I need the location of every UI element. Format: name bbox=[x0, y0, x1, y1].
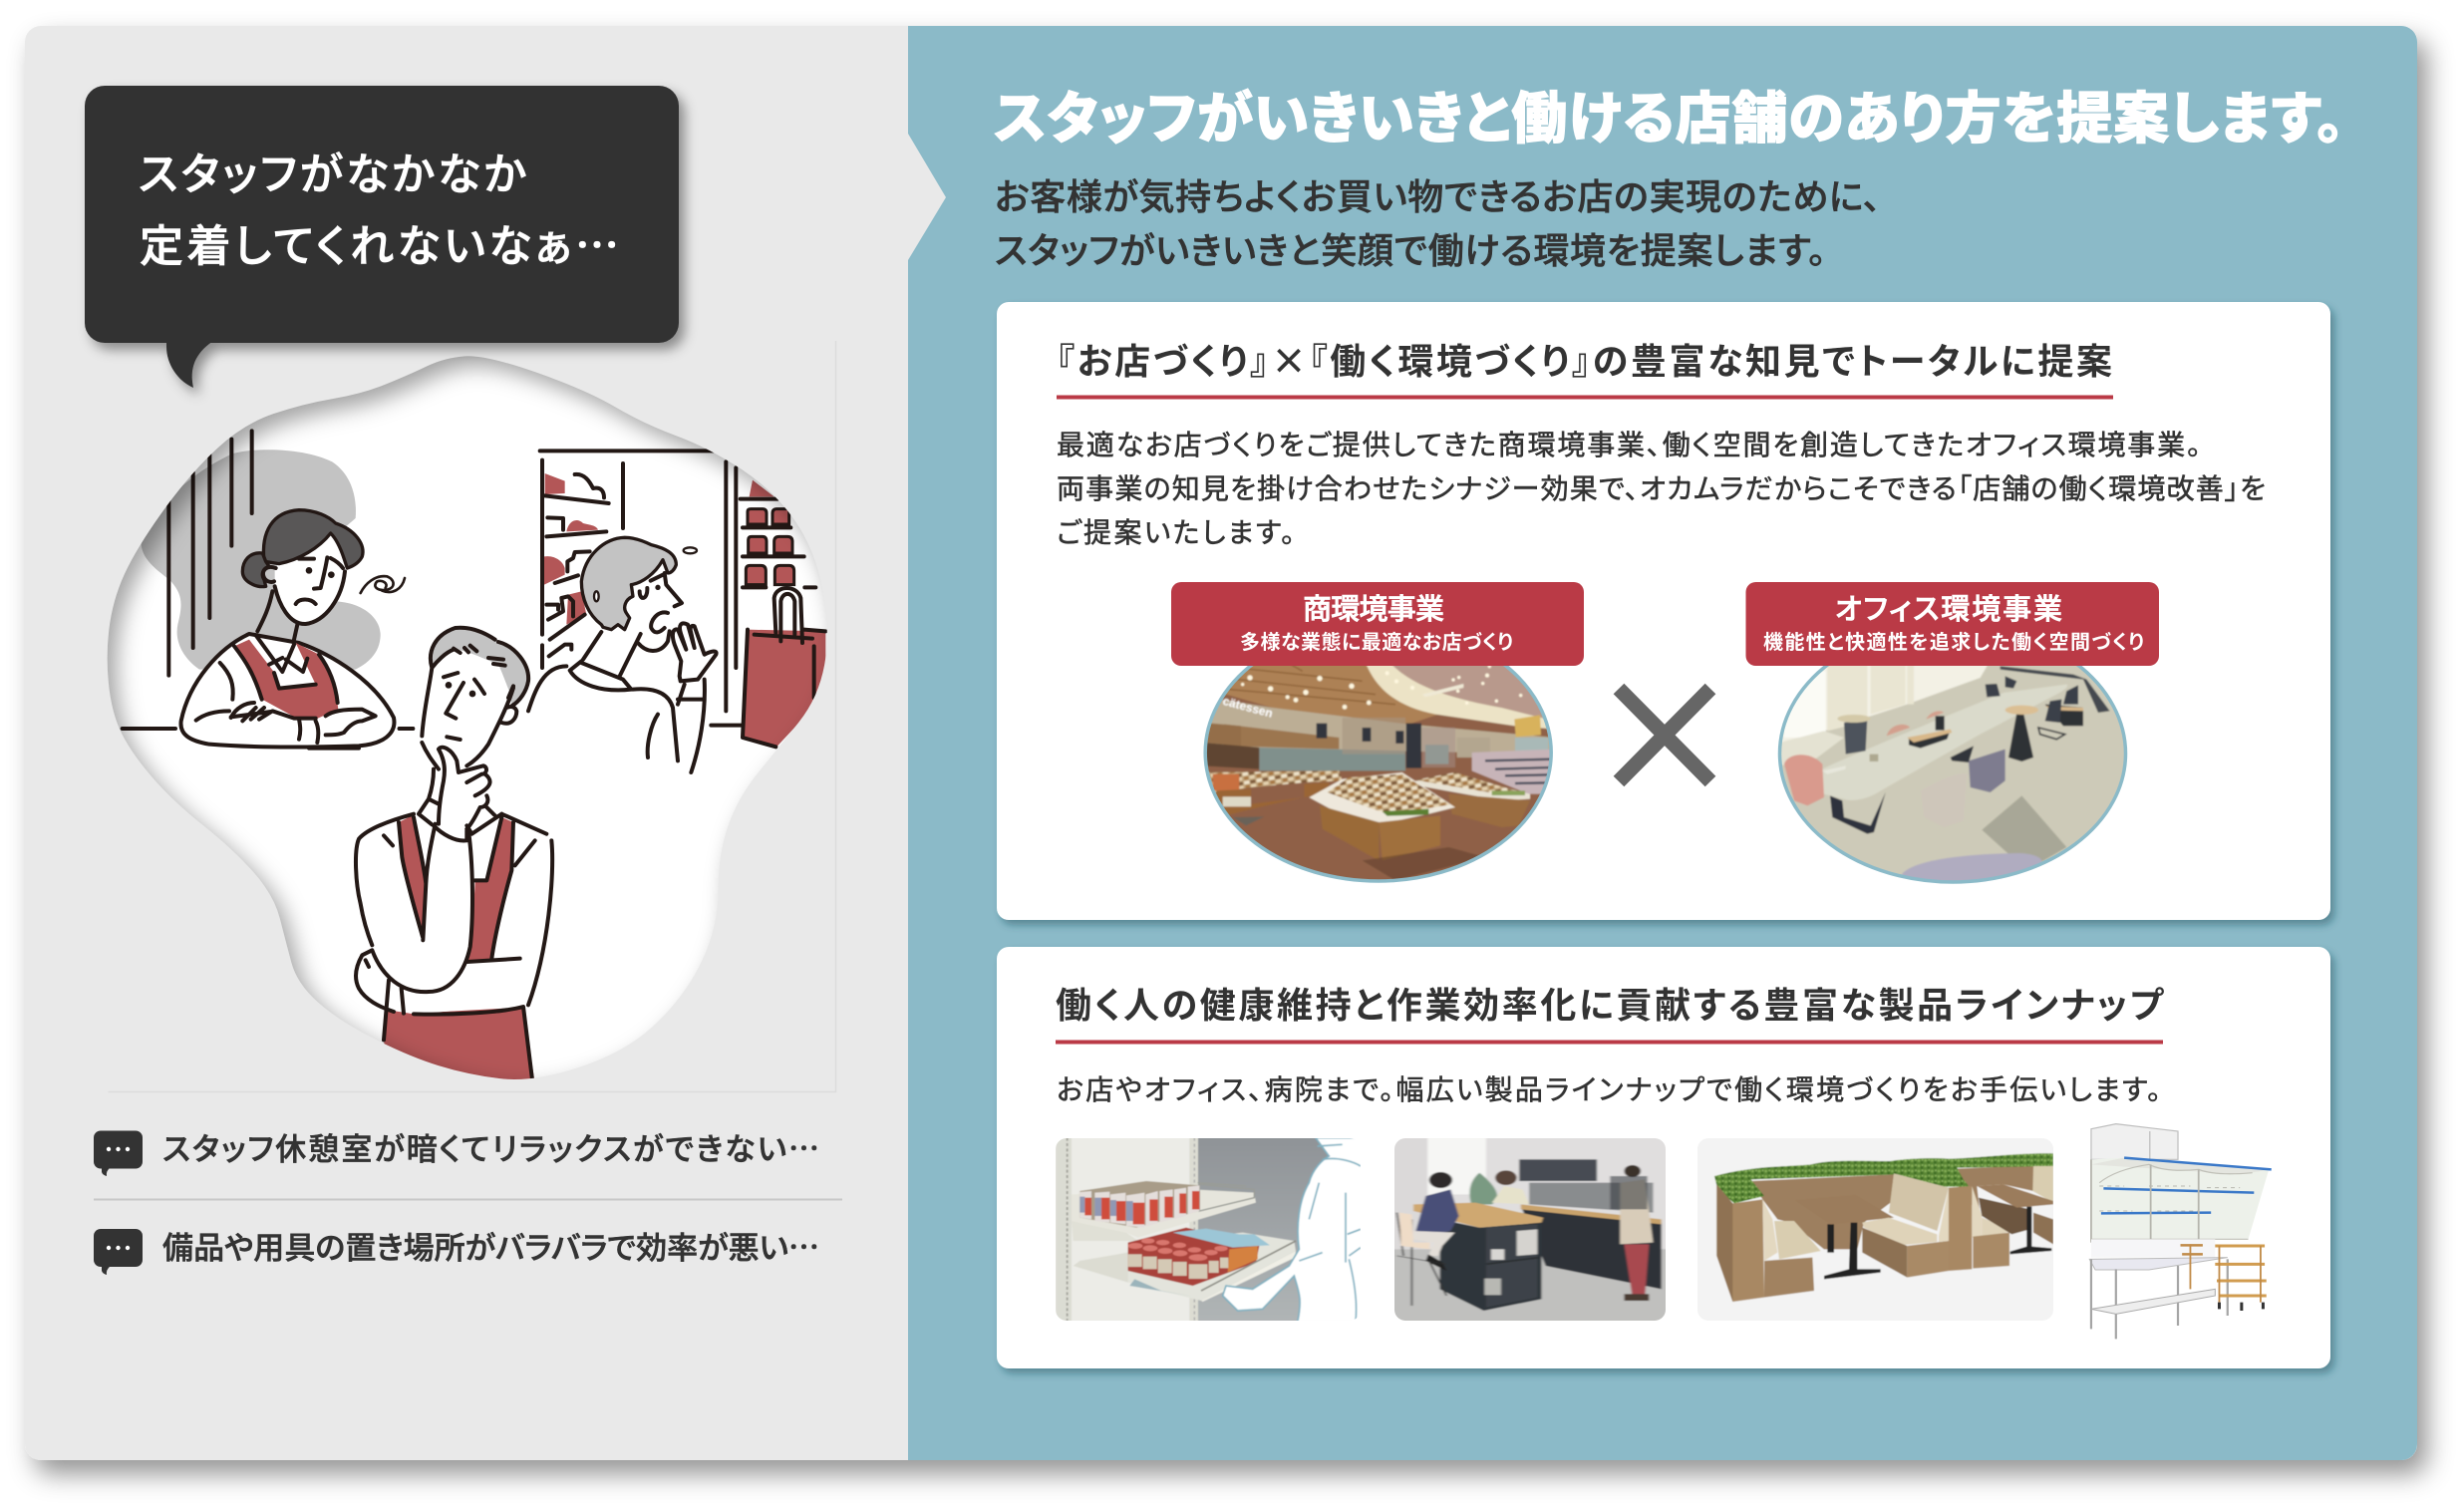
speech bubble bbox=[85, 86, 679, 388]
photo: display shelving unit bbox=[2089, 1124, 2272, 1339]
card background bbox=[997, 302, 2330, 920]
label: office business: 機能性と快適性を追求した働く空間づくり bbox=[1763, 631, 2144, 654]
subheading: お客様が気持ちよくお買い物できるお店の実現のために、 bbox=[995, 176, 1881, 217]
photo: sliding shelf bbox=[1054, 1136, 1366, 1323]
photo: booth seating bbox=[1694, 1136, 2056, 1323]
divider bbox=[94, 1198, 842, 1200]
heading underline bbox=[1056, 1041, 2163, 1045]
speech bubble text: スタッフがなかなか bbox=[139, 151, 526, 199]
icon: chat bubble bbox=[94, 1130, 143, 1176]
card body text bbox=[1057, 430, 2266, 548]
concern item 2: 備品や用具の置き場所がバラバラで効率が悪い… bbox=[162, 1223, 819, 1268]
concern item 1: スタッフ休憩室が暗くてリラックスができない… bbox=[162, 1124, 819, 1169]
blob inner shadow bbox=[108, 356, 827, 1079]
illustration: thinking male staff bbox=[356, 628, 552, 1089]
card background bbox=[997, 947, 2330, 1368]
label: office business bbox=[1746, 582, 2159, 666]
illustration: worried female staff bbox=[123, 431, 413, 749]
label: store business bbox=[1171, 582, 1584, 666]
card body text: 両事業の知見を掛け合わせたシナジー効果で、オカムラだからこそできる「店舗の働く環境改善」を bbox=[1057, 473, 2266, 504]
illustration: shelves and shopping customer bbox=[528, 451, 825, 774]
speech bubble text: 定着してくれないなぁ… bbox=[140, 210, 619, 274]
speech bubble text bbox=[139, 151, 619, 274]
photo: store interior: cätessen bbox=[1221, 694, 1274, 721]
card body text: 最適なお店づくりをご提供してきた商環境事業、働く空間を創造してきたオフィス環境事業。 bbox=[1057, 430, 2201, 460]
subheading bbox=[995, 176, 1881, 271]
card body text: お店やオフィス、病院まで。幅広い製品ラインナップで働く環境づくりをお手伝いします。 bbox=[1057, 1074, 2161, 1105]
illustration: shop scene blob bbox=[108, 356, 827, 1079]
card heading: 『お店づくり』×『働く環境づくり』の豊富な知見でトータルに提案 bbox=[1057, 333, 2112, 385]
label: office business: オフィス環境事業 bbox=[1835, 593, 2062, 626]
card heading: 働く人の健康維持と作業効率化に貢献する豊富な製品ラインナップ bbox=[1056, 985, 2165, 1026]
photo: cafe counter bbox=[1388, 1136, 1670, 1326]
label: store business: 商環境事業 bbox=[1303, 593, 1444, 626]
icon: multiply sign bbox=[1619, 689, 1710, 781]
subheading: スタッフがいきいきと笑顔で働ける環境を提案します。 bbox=[995, 230, 1826, 271]
illustration frame bbox=[108, 341, 835, 1092]
panel: left problem panel bbox=[83, 85, 842, 1275]
photo: office interior bbox=[1778, 666, 2127, 884]
main heading: スタッフがいきいきと働ける店舗のあり方を提案します。 bbox=[994, 88, 2344, 150]
panel: card total proposal bbox=[997, 302, 2330, 920]
icon: chat bubble bbox=[94, 1229, 143, 1275]
label: store business: 多様な業態に最適なお店づくり bbox=[1240, 631, 1513, 654]
photo: store interior bbox=[1203, 666, 1553, 883]
panel: card product lineup bbox=[997, 947, 2330, 1368]
heading underline bbox=[1057, 395, 2113, 399]
panel: right teal panel bbox=[908, 26, 2417, 1460]
card body text: ご提案いたします。 bbox=[1057, 517, 1295, 548]
